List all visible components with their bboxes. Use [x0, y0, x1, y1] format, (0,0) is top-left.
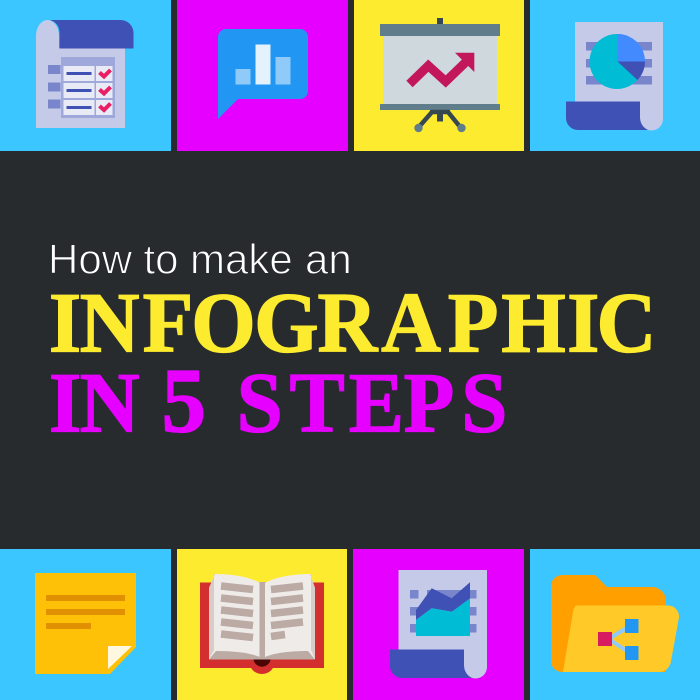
heading: infographic: INFOGRAPHIC	[49, 276, 656, 371]
panel: checklist tile	[0, 0, 171, 151]
panel: area chart document tile	[353, 549, 524, 700]
panel: title block	[48, 236, 656, 452]
panel: shared folder tile	[530, 549, 700, 700]
heading: how to make an: How	[48, 236, 133, 282]
heading: how to make an: make	[190, 236, 293, 282]
heading: how to make an: to	[144, 236, 179, 282]
heading: how to make an: an	[305, 236, 352, 282]
panel: chat bar chart tile	[177, 0, 348, 151]
heading: in 5 steps: IN 5 STEPS	[49, 349, 507, 452]
panel: sticky note tile	[0, 549, 171, 700]
panel: presentation board tile	[354, 0, 524, 151]
panel: open book tile	[177, 549, 347, 700]
panel: pie chart document tile	[530, 0, 700, 151]
